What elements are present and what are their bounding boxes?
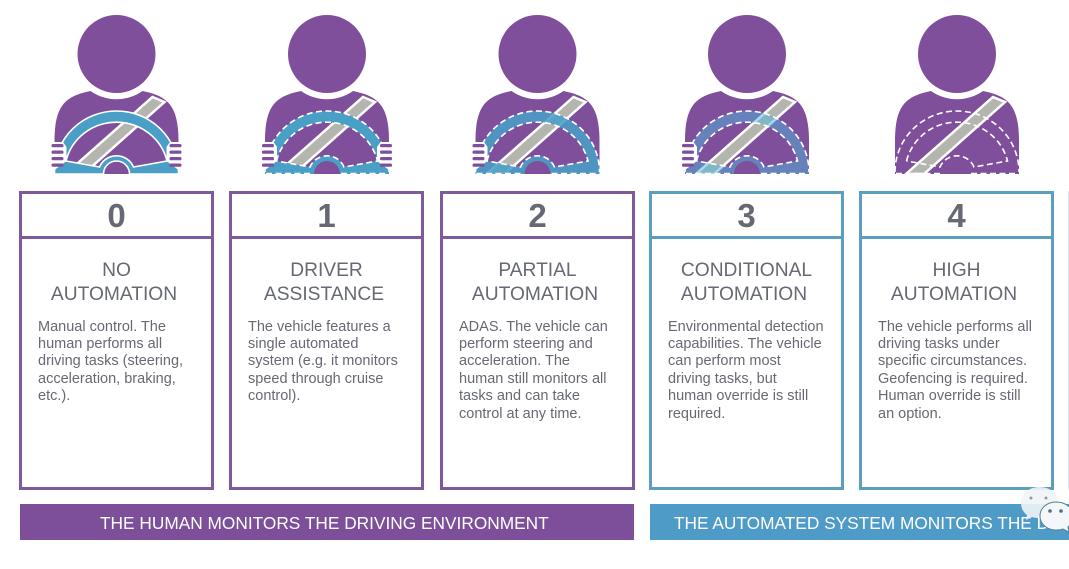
text: level 0 description: human performs all xyxy=(38,336,162,352)
text: level 3 description: can perform most xyxy=(668,353,781,369)
number 1: 1 xyxy=(317,197,336,234)
heading: driver assistance: DRIVER xyxy=(290,260,363,281)
icon: driver level 4 xyxy=(895,15,1019,174)
text: level 2 description: human still monitors all xyxy=(459,371,606,387)
text: level 4 description: specific circumstances. xyxy=(878,353,1027,369)
panel: level 3 xyxy=(649,191,844,490)
heading: partial automation: PARTIAL xyxy=(498,260,577,281)
heading: partial automation: AUTOMATION xyxy=(472,284,598,305)
text: level 4 description: an option. xyxy=(878,406,942,422)
text: level 3 description: Environmental detection xyxy=(668,318,824,334)
text: level 2 description: acceleration. The xyxy=(459,353,570,369)
text: level 1 description: control). xyxy=(248,388,300,404)
text: level 3 description: required. xyxy=(668,406,725,422)
text: level 1 description: The vehicle features a xyxy=(248,318,391,334)
number 1 xyxy=(232,194,421,239)
text: level 2 description: perform steering and xyxy=(459,336,593,352)
text: level 0 description: driving tasks (steering, xyxy=(38,353,183,369)
panel: level 4 xyxy=(859,191,1054,490)
number 2: 2 xyxy=(528,197,547,234)
panel: next level edge xyxy=(1068,191,1069,490)
text: level 0 description: acceleration, braking, xyxy=(38,371,176,387)
text: level 4 description: driving tasks under xyxy=(878,336,1000,352)
number 0: 0 xyxy=(107,197,126,234)
icon: driver level 2 xyxy=(470,15,600,174)
text: level 4 description: The vehicle performs all xyxy=(878,318,1032,334)
driver icons row xyxy=(52,15,1019,174)
panel: level 0 xyxy=(19,191,214,490)
text: level 3 description xyxy=(668,318,824,422)
text: level 2 description xyxy=(459,318,608,422)
text: level 1 description: single automated xyxy=(248,336,358,352)
text: level 2 description: tasks and can take xyxy=(459,388,580,404)
text: level 3 description: human override is still xyxy=(668,388,808,404)
text: level 0 description xyxy=(38,318,183,404)
heading: high automation xyxy=(891,260,1017,305)
text: level 1 description: system (e.g. it monitors xyxy=(248,353,398,369)
text: level 0 description: etc.). xyxy=(38,388,70,404)
heading: no automation: AUTOMATION xyxy=(51,284,177,305)
heading: high automation: HIGH xyxy=(933,260,980,281)
heading: partial automation xyxy=(472,260,598,305)
text: level 4 description xyxy=(878,318,1032,422)
text: level 3 description: driving tasks, but xyxy=(668,371,777,387)
heading: no automation: NO xyxy=(102,260,131,281)
icon: driver level 0 xyxy=(50,15,184,174)
icon: driver level 3 xyxy=(680,15,809,174)
text: level 0 description: Manual control. The xyxy=(38,318,166,334)
number 4: 4 xyxy=(947,197,966,234)
banner: human monitors: THE HUMAN MONITORS THE DRIVING ENVIRONMENT xyxy=(100,513,549,533)
panel: level 2 xyxy=(440,191,635,490)
banner: automated system monitors xyxy=(650,504,1069,540)
number 0 xyxy=(22,194,211,239)
heading: driver assistance: ASSISTANCE xyxy=(264,284,384,305)
heading: conditional automation: AUTOMATION xyxy=(681,284,807,305)
text: level 1 description: speed through cruise xyxy=(248,371,383,387)
heading: driver assistance xyxy=(264,260,384,305)
heading: no automation xyxy=(51,260,177,305)
number 4 xyxy=(862,194,1051,239)
text: level 1 description xyxy=(248,318,398,404)
number 3 xyxy=(652,194,841,239)
icon: driver level 1 xyxy=(260,15,394,174)
banner: human monitors xyxy=(20,504,634,540)
panel: level 1 xyxy=(229,191,424,490)
text: level 4 description: Geofencing is required. xyxy=(878,371,1028,387)
number 3: 3 xyxy=(737,197,756,234)
text: level 2 description: ADAS. The vehicle can xyxy=(459,318,608,334)
heading: conditional automation xyxy=(681,260,812,305)
heading: conditional automation: CONDITIONAL xyxy=(681,260,812,281)
text: level 2 description: control at any time. xyxy=(459,406,582,422)
number 2 xyxy=(443,194,632,239)
text: level 4 description: Human override is still xyxy=(878,388,1021,404)
text: level 3 description: capabilities. The vehicle xyxy=(668,336,822,352)
heading: high automation: AUTOMATION xyxy=(891,284,1017,305)
